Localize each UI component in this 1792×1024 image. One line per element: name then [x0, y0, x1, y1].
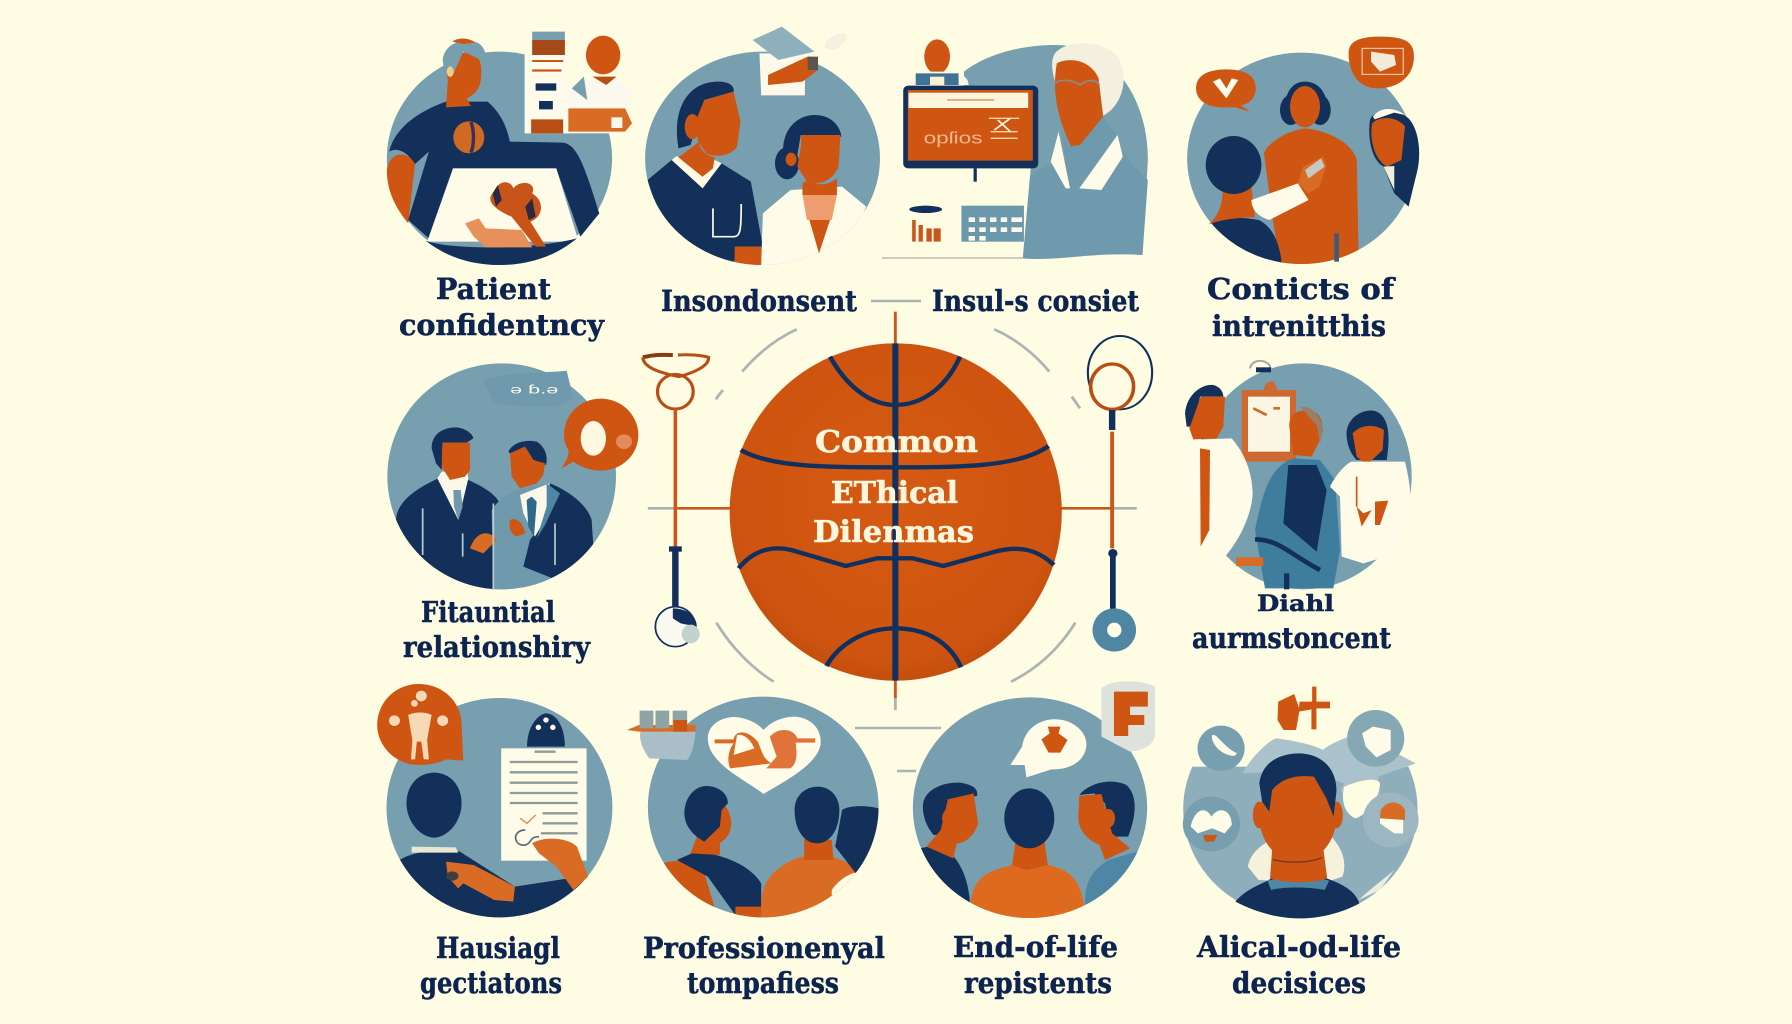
heading — [1192, 591, 1392, 655]
heading: repistents — [964, 966, 1112, 1000]
heading: Conticts of — [1207, 272, 1397, 306]
panel: patient confidentiality — [387, 32, 638, 342]
heading — [420, 931, 562, 1000]
illustration: people and heart bubble — [627, 697, 883, 918]
heading: intrenitthis — [1212, 309, 1386, 343]
heading: aurmstoncent — [1192, 621, 1392, 655]
heading — [1196, 930, 1401, 1000]
heading: relationshiry — [403, 630, 591, 664]
basketball — [730, 343, 1062, 681]
illustration: two men in suits — [387, 363, 638, 590]
heading: Hausiagl — [436, 931, 560, 965]
icon: left stethoscope — [643, 355, 709, 647]
heading: Patient — [436, 272, 552, 306]
illustration: man with ultrasound screen — [387, 32, 638, 265]
ball title: Dilenmas — [813, 515, 974, 550]
panel: end-of-life recipients — [913, 681, 1155, 1000]
ball seams — [739, 343, 1054, 681]
illustration: doctor and nurse — [645, 27, 880, 267]
heading: decisices — [1232, 966, 1366, 1000]
heading: End-of-life — [953, 930, 1118, 964]
illustration: monitor and elder: opſios — [924, 128, 983, 147]
panel: informed consent right — [882, 39, 1148, 318]
ball title: EThical — [831, 476, 958, 511]
illustration: three people facing bubble — [913, 681, 1155, 920]
heading — [403, 595, 591, 664]
illustration: two men in suits: ə ɓ.ə — [510, 382, 559, 396]
heading — [399, 272, 605, 342]
panel: conflicts of interest — [1187, 37, 1419, 343]
illustration: person signing clipboard — [377, 684, 612, 923]
panel: professional boundaries — [627, 697, 885, 1000]
panel: dual arrangement — [1182, 361, 1412, 655]
heading: Professionenyal — [643, 931, 885, 965]
ball title: Common — [815, 425, 978, 460]
heading: Alical-od-life — [1196, 930, 1401, 964]
heading — [1207, 272, 1397, 343]
heading: Insondonsent — [661, 284, 858, 318]
icon: right stethoscope — [1088, 336, 1152, 652]
panel: central basketball — [643, 312, 1152, 710]
panel: financial relationships — [387, 363, 638, 664]
illustration: three clinicians — [1182, 361, 1412, 589]
panel: end-of-life decisions — [1180, 687, 1423, 1000]
ball title — [813, 425, 978, 550]
heading: Insul-s consiet — [932, 284, 1140, 318]
heading: tompafiess — [687, 966, 839, 1000]
heading: gectiatons — [420, 966, 562, 1000]
illustration: three people — [1187, 37, 1419, 265]
illustration: man with thought icons — [1180, 687, 1423, 923]
connector lines between panels — [855, 301, 941, 771]
axis lines — [648, 312, 1137, 710]
heading: Fitauntial — [421, 595, 555, 629]
illustration: monitor and elder — [882, 39, 1148, 259]
panel: informed consent left — [645, 27, 880, 318]
heading — [953, 930, 1118, 1000]
panel: hospital regulations — [377, 684, 612, 1000]
heading — [643, 931, 885, 1000]
decorative arcs around ball — [716, 329, 1080, 682]
heading: Diahl — [1257, 591, 1334, 617]
heading: confidentncy — [399, 308, 605, 342]
